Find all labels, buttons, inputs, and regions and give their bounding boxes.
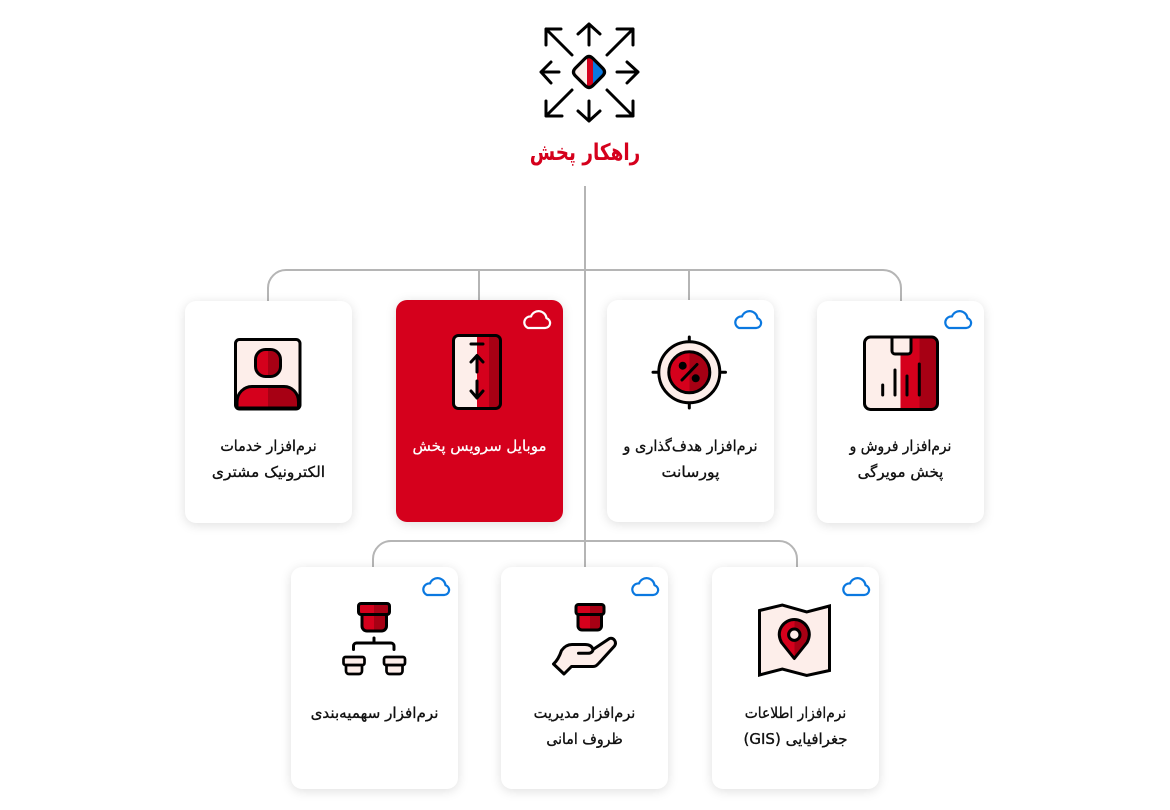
icon: cloud [842, 577, 870, 596]
label line 2: الکترونیک مشتری [212, 463, 325, 481]
icon: cloud [422, 577, 450, 596]
panel: deposit container management software [501, 567, 668, 789]
label: نرم‌افزار سهمیه‌بندی [311, 704, 438, 722]
label line 2: جغرافیایی (GIS) [744, 730, 847, 748]
icon: distribution arrows [539, 22, 640, 123]
panel: geographic information software [712, 567, 879, 789]
panel: quota allocation software [291, 567, 458, 789]
icon: quota tree [342, 602, 406, 676]
icon: phone [452, 334, 502, 410]
title: راهکار پخش [530, 140, 640, 166]
label: نرم‌افزار خدمات [220, 437, 317, 455]
icon: cloud [944, 310, 972, 330]
icon: cloud [631, 577, 660, 596]
panel: target and commission software [607, 300, 774, 522]
label: موبایل سرویس پخش [413, 437, 546, 455]
panel: mobile distribution service [396, 300, 563, 522]
icon: percent target [652, 336, 727, 410]
icon: cloud [734, 310, 762, 330]
icon: cloud [523, 310, 552, 330]
label line 2: پورسانت [662, 463, 719, 481]
panel: customer service software [185, 301, 352, 523]
label: نرم‌افزار اطلاعات [745, 704, 846, 722]
icon: map pin [758, 604, 831, 677]
icon: customer profile [234, 338, 302, 410]
label: نرم‌افزار فروش و [850, 437, 951, 455]
label: نرم‌افزار هدف‌گذاری و [623, 437, 758, 455]
icon: box chart [863, 336, 939, 411]
icon: hand holding container [552, 603, 617, 676]
panel: sales and capillary distribution software [817, 301, 984, 523]
label line 2: پخش مویرگی [858, 463, 943, 481]
label line 2: ظروف امانی [546, 730, 623, 748]
label: نرم‌افزار مدیریت [534, 704, 635, 722]
